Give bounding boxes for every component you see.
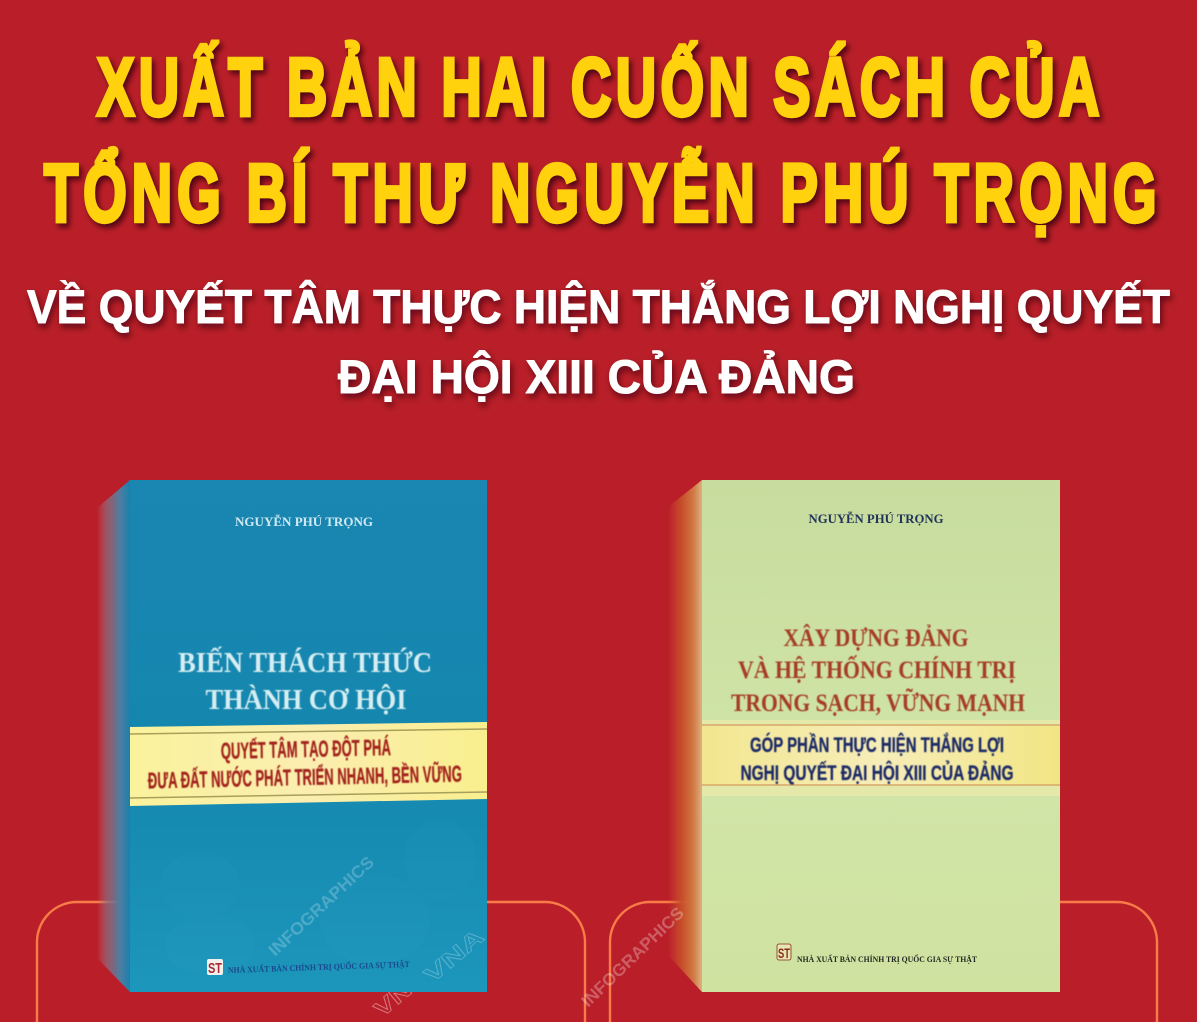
book title: VÀ HỆ THỐNG CHÍNH TRỊ <box>738 655 1016 684</box>
yellow band <box>130 722 487 806</box>
yellow band: QUYẾT TÂM TẠO ĐỘT PHÁ <box>221 733 391 764</box>
subtitle <box>27 280 1170 403</box>
yellow band: NGHỊ QUYẾT ĐẠI HỘI XIII CỦA ĐẢNG <box>740 761 1014 785</box>
book author: NGUYỄN PHÚ TRỌNG <box>235 514 373 529</box>
panel: left outline <box>37 902 585 1022</box>
book lotus pattern <box>160 820 476 975</box>
publisher name: NHÀ XUẤT BẢN CHÍNH TRỊ QUỐC GIA SỰ THẬT <box>228 959 410 975</box>
book spine <box>97 480 130 992</box>
watermark: infographics on right panel: INFOGRAPHICS <box>578 903 688 1011</box>
publisher logo <box>777 944 791 961</box>
watermark: VN – VNA: VN – VNA <box>369 916 489 1022</box>
yellow band: ĐƯA ĐẤT NƯỚC PHÁT TRIỂN NHANH, BỀN VỮNG <box>148 760 462 793</box>
infographics watermark: INFOGRAPHICS <box>265 853 378 960</box>
book cover <box>702 480 1060 992</box>
publisher logo: ST <box>208 960 222 977</box>
book author: NGUYỄN PHÚ TRỌNG <box>808 511 944 526</box>
publisher logo: ST <box>778 945 790 961</box>
book: Biến thách thức thành cơ hội <box>97 480 489 992</box>
book title <box>731 624 1025 717</box>
yellow band: GÓP PHẦN THỰC HIỆN THẮNG LỢI <box>750 733 1004 757</box>
book spine <box>668 480 702 992</box>
book title: BIẾN THÁCH THỨC <box>178 645 432 679</box>
subtitle: ĐẠI HỘI XIII CỦA ĐẢNG <box>338 350 855 403</box>
book title: XÂY DỰNG ĐẢNG <box>784 624 968 652</box>
panel: right outline <box>610 902 1157 1022</box>
book cover <box>130 480 487 992</box>
title: TỔNG BÍ THƯ NGUYỄN PHÚ TRỌNG <box>44 146 1156 239</box>
title: XUẤT BẢN HAI CUỐN SÁCH CỦA <box>97 40 1099 133</box>
book: Xây dựng Đảng và hệ thống chính trị <box>668 480 1060 992</box>
book title: THÀNH CƠ HỘI <box>206 683 406 716</box>
book title: TRONG SẠCH, VỮNG MẠNH <box>731 688 1025 717</box>
watermark: VNA on cover: VNA <box>419 924 489 988</box>
yellow band <box>702 720 1060 796</box>
publisher name: NHÀ XUẤT BẢN CHÍNH TRỊ QUỐC GIA SỰ THẬT <box>797 954 977 964</box>
book title <box>178 645 432 716</box>
title <box>44 40 1156 239</box>
